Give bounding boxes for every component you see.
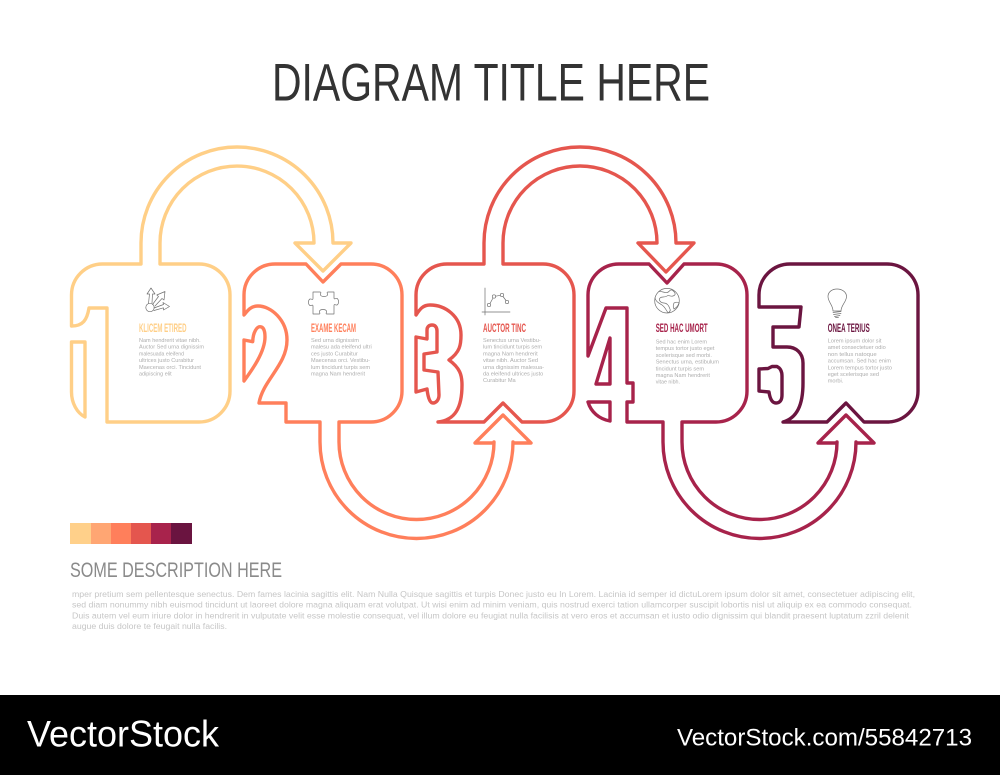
text block: amet consectetuer odio <box>828 345 886 351</box>
description paragraph: mper pretium sem pellentesque senectus. Dem fames lacinia sagittis elit. Nam Nulla Quisque sagittis et turpis Donec justo eu In Lorem. Lacinia id semper id dictuLorem ipsum dolor sit amet, consectetuer adipiscing elit, <box>72 589 915 599</box>
number 5 outline <box>759 264 918 422</box>
description paragraph: sed diam nonummy nibh euismod tincidunt ut laoreet dolore magna aliquam erat volutpat. Ut wisi enim ad minim veniam, quis nostrud exerci tation ullamcorper suscipit lobortis nisl ut aliquip ex ea commodo consequat. <box>72 600 912 610</box>
panel: step 5 <box>759 264 918 422</box>
description paragraph: Duis autem vel eum iriure dolor in hendrerit in vulputate velit esse molestie consequat, vel illum dolore eu feugiat nulla facilisis at vero eros et accumsan et iusto odio dignissim qui blandit praesent luptatum zzril delenit <box>72 610 910 620</box>
number 4 outline with arrow to step 5 <box>588 264 874 538</box>
heading: SED HAC UMORT <box>656 323 708 335</box>
title: DIAGRAM TITLE HERE <box>272 54 710 112</box>
text block: Lorem tempus tortor justo <box>828 365 892 371</box>
text block: morbi. <box>828 379 844 385</box>
footer logo: VectorStock <box>27 714 219 755</box>
text block <box>483 338 544 384</box>
description paragraph <box>72 589 915 631</box>
panel: step 1 <box>72 147 351 422</box>
text block <box>139 338 204 378</box>
description heading: SOME DESCRIPTION HERE <box>70 559 282 582</box>
colour legend swatches <box>70 523 192 544</box>
text block: Auctor Sed urna dignissim <box>139 345 204 351</box>
text block: Senectus urna, estibulum <box>656 360 719 366</box>
panel: step 3 <box>416 147 694 422</box>
heading: EXAME KECAM <box>311 323 356 335</box>
text block: lum tincidunt turpis sem <box>311 365 370 371</box>
text block: magna Nam hendrerit <box>311 372 365 378</box>
number 1 outline with arrow to step 2 <box>72 147 351 422</box>
text block: malesuada eleifend <box>139 351 184 357</box>
text block: Sed hac enim Lorem <box>656 340 707 346</box>
panel: step 4 <box>588 264 874 538</box>
footer image id: VectorStock.com/55842713 <box>677 725 972 752</box>
text block: Maecenas orci. Vestibu- <box>311 358 370 364</box>
icon: line chart <box>482 288 510 315</box>
text block: ultrices justo Curabitur <box>139 358 194 364</box>
icon: branching arrows <box>146 288 170 312</box>
text block: da eleifend ultrices justo <box>483 372 543 378</box>
text block: Curabitur Ma <box>483 378 517 384</box>
text block: scelerisque sed morbi. <box>656 353 712 359</box>
panel: step 2 <box>244 264 531 538</box>
text block <box>311 338 372 378</box>
text block: lum tincidunt turpis sem <box>483 345 542 351</box>
text block: magna Nam hendrerit <box>656 373 710 379</box>
text block: vitae nibh. Auctor Sed <box>483 358 538 364</box>
heading: AUCTOR TINC <box>483 323 526 335</box>
text block: malesu ada eleifend ultri <box>311 345 372 351</box>
text block: accumsan. Sed hac enim <box>828 359 891 365</box>
text block: tincidunt turpis sem <box>656 366 704 372</box>
icon: globe <box>655 288 679 313</box>
text block: non tellus natoque <box>828 352 877 358</box>
heading: ONEA TERIUS <box>828 323 870 335</box>
text block: Maecenas orci. Tincidunt <box>139 365 201 371</box>
description paragraph: augue duis dolore te feugait nulla facilis. <box>72 621 227 631</box>
text block: vitae nibh. <box>656 380 680 386</box>
number 3 outline with arrow to step 4 <box>416 147 694 422</box>
footer bar <box>0 695 1000 775</box>
heading: KLICEM ETIRED <box>139 323 186 335</box>
text block: Senectus urna Vestibu- <box>483 338 541 344</box>
text block: urna dignissim malesua- <box>483 365 544 371</box>
text block <box>828 338 892 385</box>
text block <box>656 340 719 386</box>
text block: ces justo Curabitur <box>311 351 358 357</box>
text block: magna Nam hendrerit <box>483 351 538 357</box>
text block: tempus tortor justo eget <box>656 346 715 352</box>
text block: adipiscing elit <box>139 372 172 378</box>
text block: eget scelerisque sed <box>828 372 879 378</box>
icon: light bulb <box>828 289 846 318</box>
icon: puzzle piece <box>308 292 338 314</box>
number 2 outline with arrow to step 3 <box>244 264 531 538</box>
text block: Nam hendrerit vitae nibh. <box>139 338 201 344</box>
text block: Lorem ipsum dolor sit <box>828 338 882 344</box>
text block: Sed urna dignissim <box>311 338 359 344</box>
